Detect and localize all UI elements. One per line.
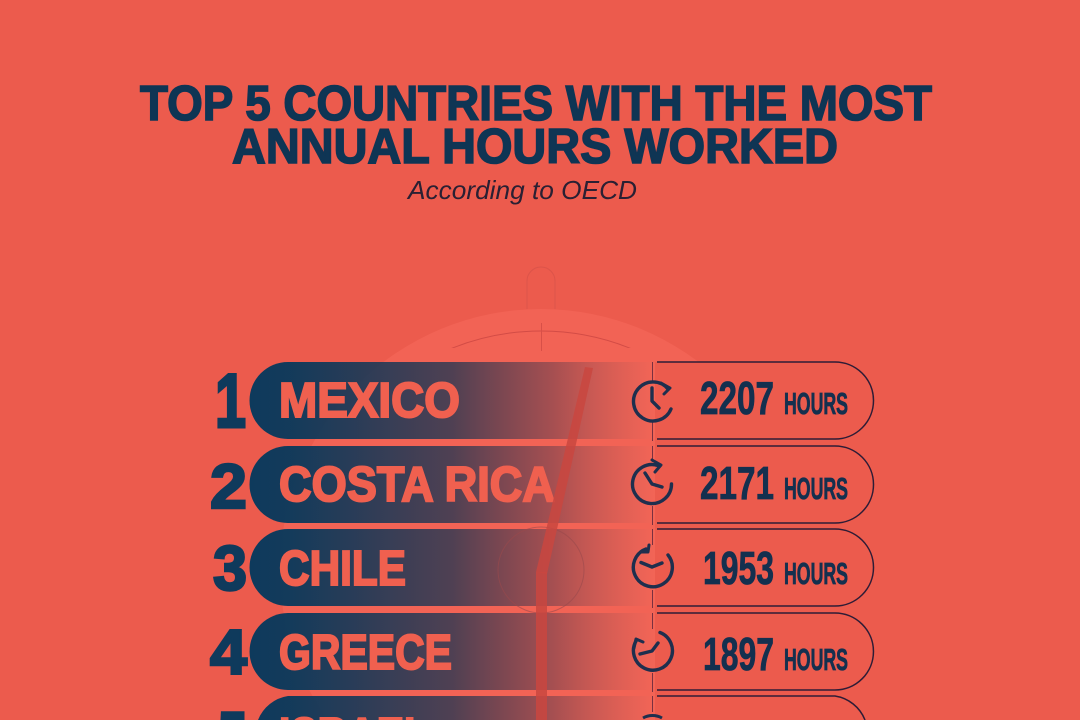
value pill (657, 696, 865, 720)
clock crown knob (527, 267, 555, 309)
country bar (250, 362, 655, 439)
rank number: 1 (215, 359, 246, 444)
hours value: 1953 (703, 542, 774, 594)
title: TOP 5 COUNTRIES WITH THE MOST (140, 77, 932, 131)
hours unit: HOURS (784, 386, 848, 421)
country bar (250, 446, 655, 523)
background clock illustration (452, 266, 630, 351)
hours value: 2207 (700, 372, 774, 424)
country name: CHILE (279, 542, 406, 596)
title: ANNUAL HOURS WORKED (232, 120, 838, 174)
connector (652, 446, 654, 525)
country name: GREECE (279, 626, 452, 680)
row 2: Costa Rica (210, 446, 874, 525)
icon: clock (633, 460, 672, 504)
icon: clock (643, 716, 662, 718)
icon: clock (634, 382, 671, 421)
connector (652, 529, 654, 608)
hours value: 1897 (703, 628, 774, 680)
value pill (657, 613, 873, 690)
icon: clock (633, 632, 672, 670)
row 5: Israel (218, 696, 865, 720)
rank number: 3 (213, 534, 247, 604)
country bar (250, 529, 655, 606)
clock minute hand (536, 367, 593, 574)
country bar (250, 613, 655, 690)
row 1: Mexico (215, 359, 874, 444)
clock face (280, 309, 802, 720)
clock inner ring (452, 330, 630, 348)
hours unit: HOURS (784, 471, 848, 506)
icon: clock (633, 545, 672, 587)
country name: MEXICO (279, 374, 460, 428)
row 4: Greece (210, 613, 873, 692)
hours value: 2171 (700, 457, 774, 509)
clock hour hand (536, 572, 547, 720)
rank number: 2 (210, 452, 247, 522)
value pill (657, 446, 874, 523)
connector (652, 613, 654, 692)
hours unit: HOURS (784, 642, 848, 677)
rank number: 4 (210, 618, 247, 688)
value pill (657, 362, 874, 439)
clock hands showing through the bars (498, 367, 593, 720)
hours unit: HOURS (784, 556, 848, 591)
country name: COSTA RICA (279, 458, 555, 512)
subtitle: According to OECD (406, 175, 637, 205)
connector (652, 362, 654, 441)
country bar (258, 696, 655, 720)
row 3: Chile (213, 529, 874, 608)
connector (652, 696, 653, 712)
clock top tick (541, 323, 542, 351)
title (140, 77, 932, 174)
value pill (657, 529, 874, 606)
clock centre ring (498, 527, 584, 613)
